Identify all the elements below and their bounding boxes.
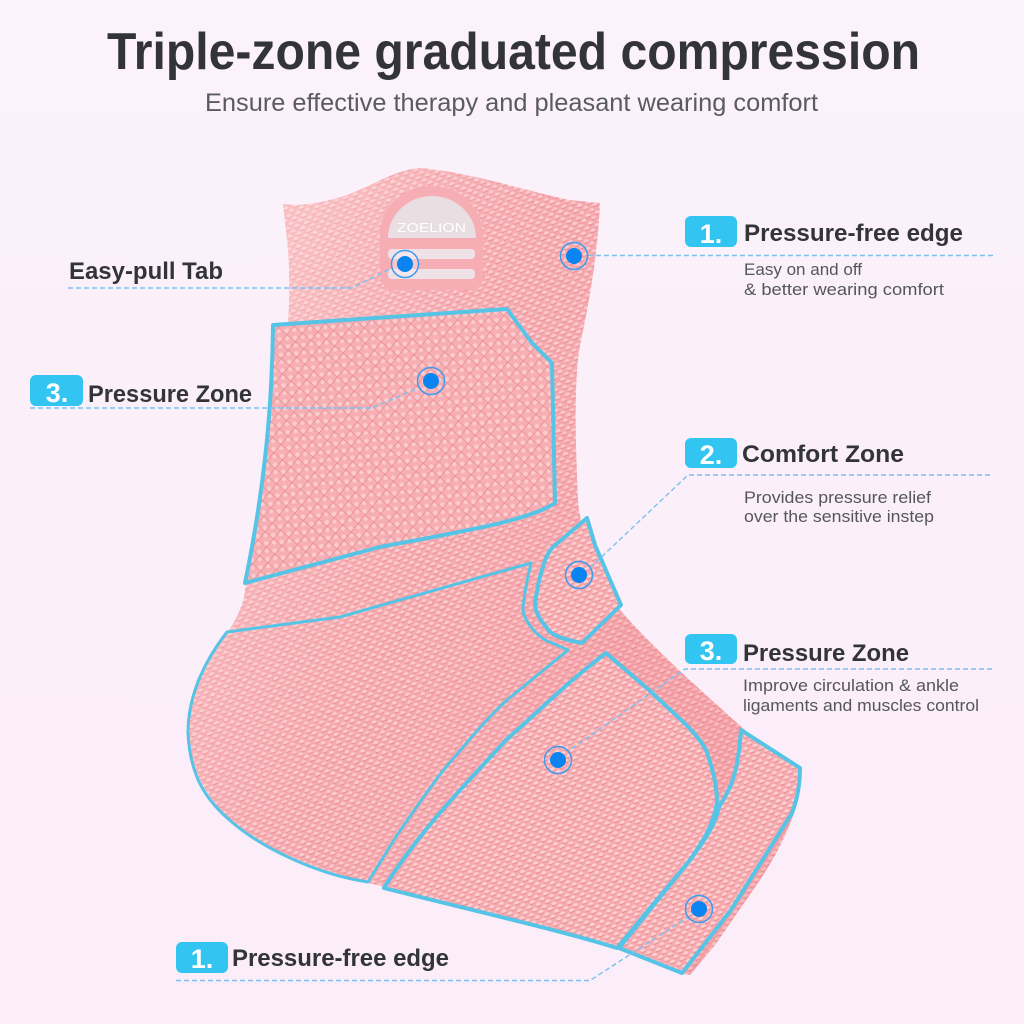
sock body [190,168,794,975]
number badge: 1. [191,944,213,974]
description: Improve circulation & ankle [743,676,959,695]
number badge: 1. [700,219,722,249]
number badge [176,942,228,974]
heading: Pressure Zone [88,381,252,408]
leader line [30,388,418,408]
marker [566,562,592,588]
marker [544,746,572,774]
ankle sock illustration [170,150,820,990]
leader line [68,268,392,288]
heading: Pressure-free edge [232,945,449,972]
leader line [570,669,992,750]
description [744,488,934,526]
leader line [176,917,688,980]
description: over the sensitive instep [744,507,934,526]
number badge [685,216,737,249]
leader line [588,254,993,256]
marker [392,250,418,278]
description: Provides pressure relief [744,488,931,507]
number badge: 3. [46,378,68,408]
number badge [685,438,737,470]
description [744,260,944,299]
marker [686,896,712,922]
description: Easy on and off [744,260,862,279]
callout: pressure zone, left [30,368,444,408]
leader line [592,475,990,566]
subtitle: Ensure effective therapy and pleasant wearing comfort [205,89,818,117]
marker [560,242,588,270]
description: & better wearing comfort [744,280,944,299]
title: Triple-zone graduated compression [107,23,920,81]
callout: easy-pull tab [68,250,418,288]
zone: upper pressure zone [245,309,555,583]
callout: pressure-free edge, bottom [176,896,712,980]
zone: toe pressure-free edge [619,730,800,973]
heading: Comfort Zone [742,441,904,468]
description: ligaments and muscles control [743,696,979,715]
callout: comfort zone [566,438,990,588]
zone: foot pressure zone [384,653,717,948]
description [743,676,979,715]
heading: Pressure Zone [743,640,909,667]
zone: heel [188,563,568,882]
brand name: ZOELION [397,221,466,235]
callout: pressure-free edge, top [560,216,993,299]
number badge: 2. [700,440,722,470]
number badge [685,634,737,666]
brand pull tab [380,186,483,290]
zone: comfort zone [535,518,621,643]
callout: pressure zone, right [544,634,992,774]
number badge [30,375,83,408]
label: Easy-pull Tab [69,258,223,285]
marker [418,368,444,394]
number badge: 3. [700,636,722,666]
heading: Pressure-free edge [744,220,963,247]
